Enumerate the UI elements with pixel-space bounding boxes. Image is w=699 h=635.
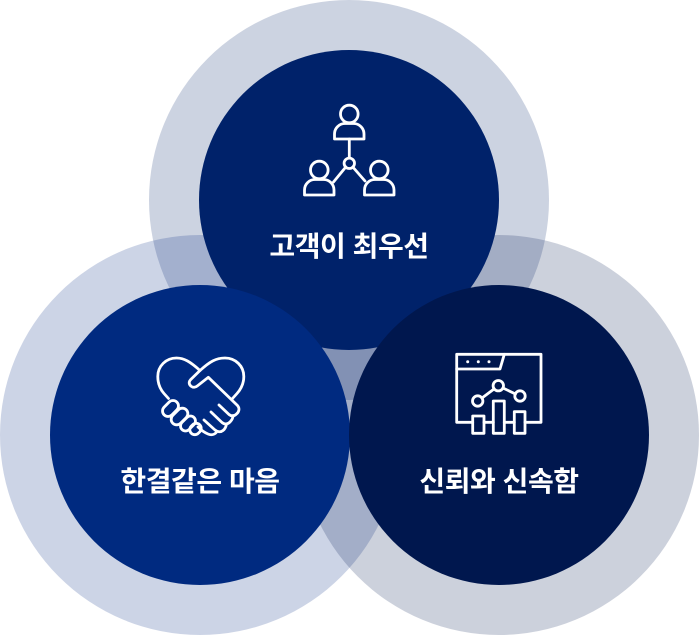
panel: top circle bbox=[199, 50, 499, 350]
icon: dashboard chart bbox=[457, 354, 541, 433]
heading: united heart: 한결같은 마음 bbox=[120, 466, 280, 497]
heading: trust and speed: 신뢰와 신속함 bbox=[419, 466, 579, 497]
panel: right circle bbox=[349, 285, 649, 585]
icon: heart handshake bbox=[158, 358, 244, 437]
panel: left circle bbox=[50, 285, 350, 585]
outer ring: left bbox=[0, 235, 400, 635]
outer ring: right bbox=[299, 235, 699, 635]
icon: connected people bbox=[304, 105, 394, 195]
heading: customer first: 고객이 최우선 bbox=[269, 231, 429, 262]
outer ring: top bbox=[149, 0, 549, 400]
